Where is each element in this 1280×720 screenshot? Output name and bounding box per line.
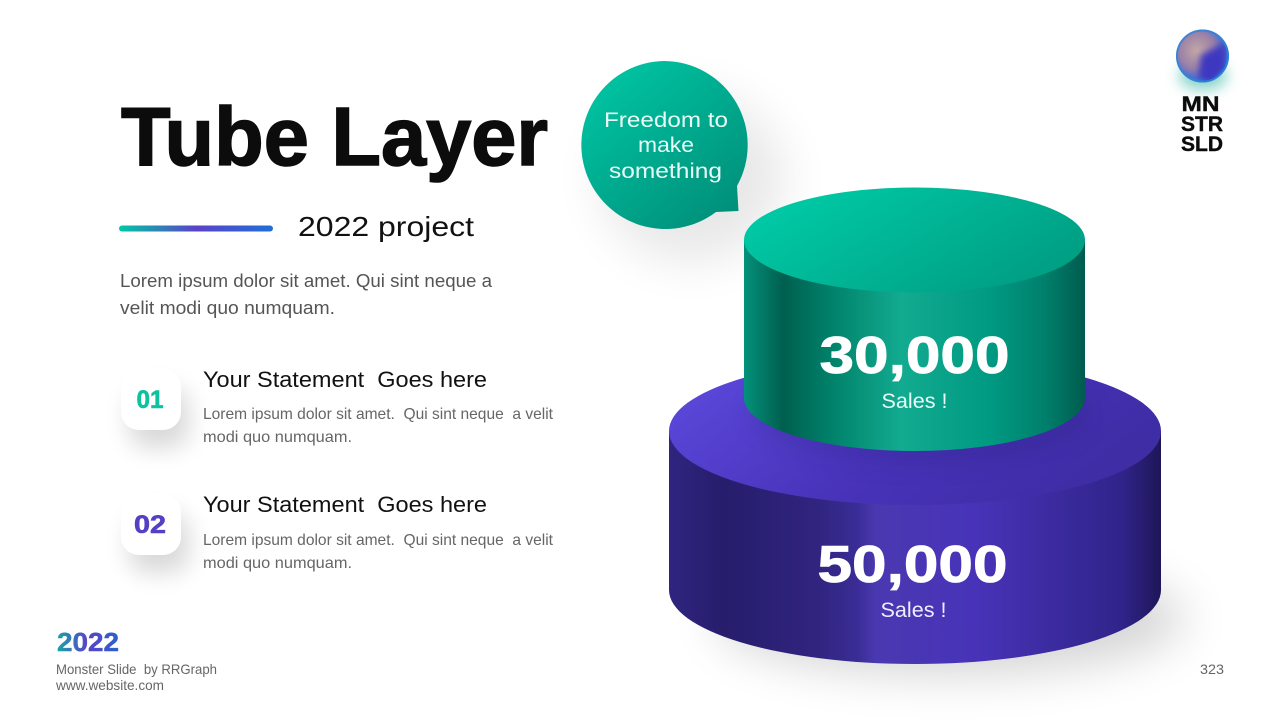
cylinder chart	[669, 188, 1185, 674]
statement heading 02: Your Statement Goes here	[203, 492, 487, 517]
bubble text	[604, 109, 728, 183]
value 50,000: 50,000	[818, 536, 1008, 594]
logo	[1176, 30, 1229, 156]
page number: 323	[1200, 661, 1224, 677]
statement 01	[121, 367, 554, 448]
statement text 01: Lorem ipsum dolor sit amet. Qui sint neque a velit	[203, 406, 554, 423]
icon: logo orb	[1176, 30, 1229, 90]
statement heading 01: Your Statement Goes here	[203, 367, 487, 392]
badge 02	[121, 494, 189, 573]
footer credits: Monster Slide by RRGraph	[56, 661, 217, 677]
accent line	[119, 226, 273, 232]
logo text: SLD	[1181, 133, 1223, 156]
statement text 01: modi quo numquam.	[203, 429, 352, 446]
bubble text: make	[638, 134, 694, 157]
statement text 02: modi quo numquam.	[203, 555, 352, 572]
intro text: velit modi quo numquam.	[120, 297, 335, 318]
badge 01: 01	[136, 386, 164, 414]
statement text 01	[203, 406, 554, 446]
badge 02: 02	[134, 511, 166, 539]
bubble text: something	[609, 160, 722, 183]
footer year: 2022	[57, 627, 119, 657]
statement text 02	[203, 532, 554, 572]
footer credits: www.website.com	[55, 677, 164, 693]
bubble text: Freedom to	[604, 109, 728, 132]
intro text	[120, 270, 493, 318]
footer credits	[55, 661, 217, 693]
purple cylinder: 50,000	[669, 357, 1161, 664]
logo text: MN	[1182, 93, 1220, 116]
logo text	[1181, 93, 1223, 156]
intro text: Lorem ipsum dolor sit amet. Qui sint neque a	[120, 270, 493, 291]
statement text 02: Lorem ipsum dolor sit amet. Qui sint neque a velit	[203, 532, 554, 549]
subtitle: 2022 project	[298, 211, 474, 242]
speech bubble	[581, 61, 784, 262]
title: Tube Layer	[121, 90, 548, 183]
contact shadow on purple top	[752, 360, 1092, 464]
statement 02	[121, 492, 554, 573]
logo text: STR	[1181, 113, 1223, 136]
footer	[55, 627, 217, 693]
label sales: Sales !	[880, 599, 946, 622]
green cylinder: 30,000	[744, 188, 1085, 451]
cylinder shadow	[715, 562, 1185, 674]
badge 01	[121, 369, 189, 448]
value 30,000: 30,000	[820, 327, 1010, 385]
label sales: Sales !	[882, 390, 948, 413]
